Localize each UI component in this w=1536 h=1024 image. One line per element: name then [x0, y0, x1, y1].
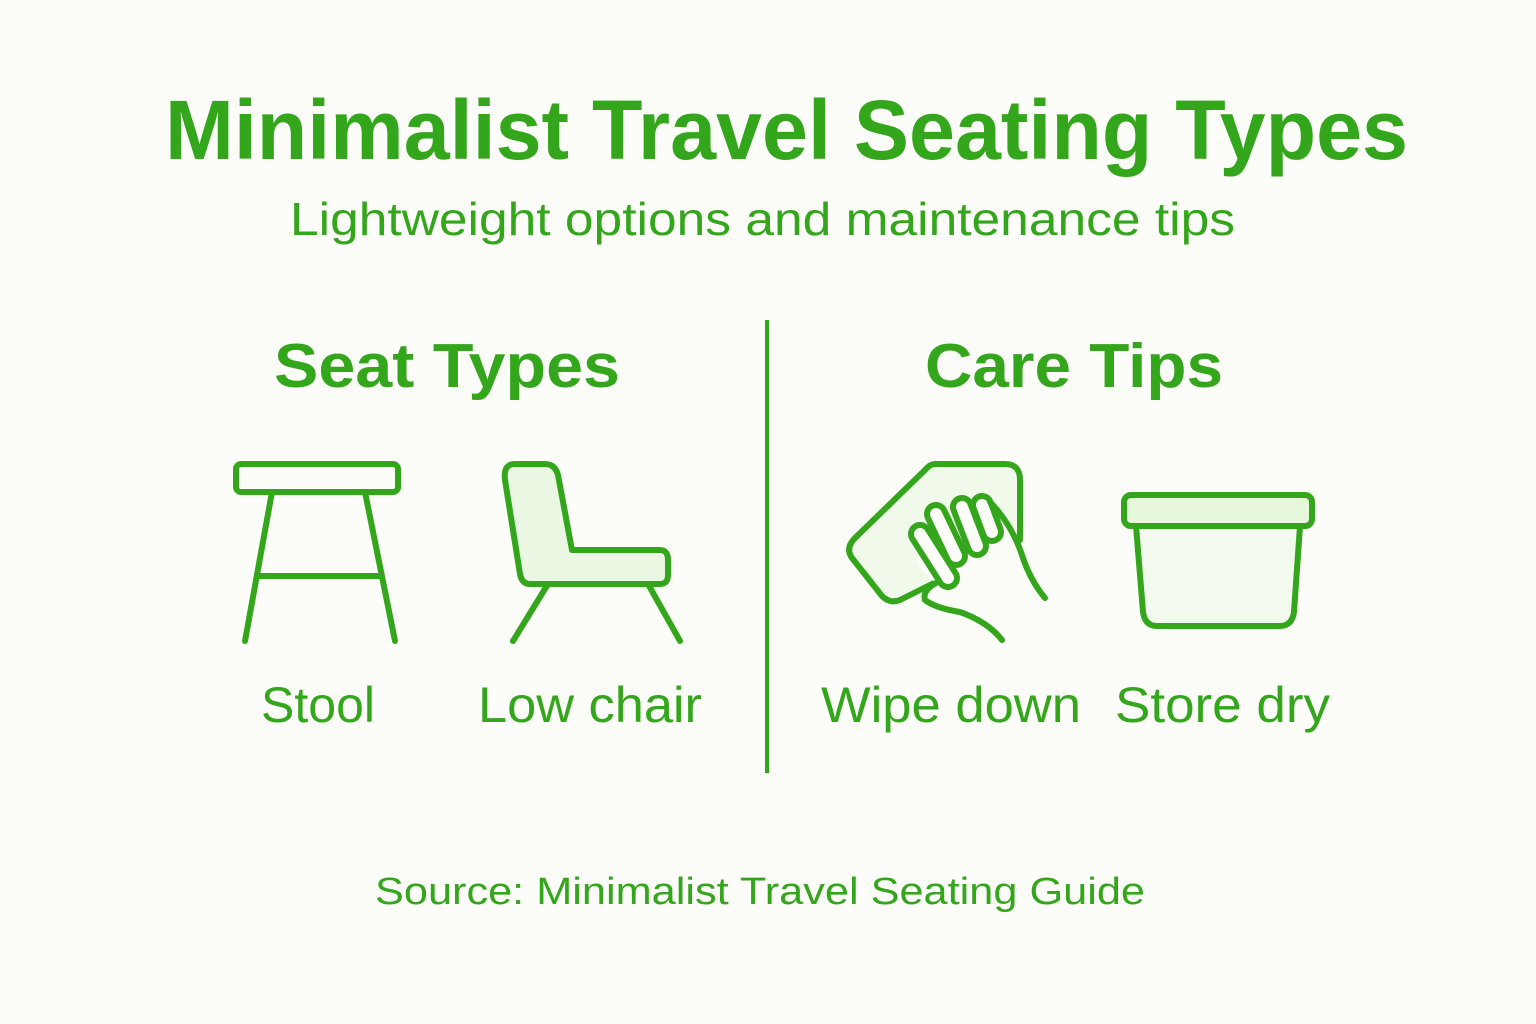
icon: store dry — [1124, 495, 1312, 626]
label: store dry: Store dry — [1115, 677, 1330, 733]
heading: seat types: Seat Types — [274, 332, 620, 401]
label: low chair: Low chair — [478, 677, 702, 733]
heading: care tips: Care Tips — [925, 332, 1223, 401]
subtitle: Lightweight options and maintenance tips — [290, 193, 1235, 245]
icon: stool — [236, 464, 398, 641]
source: Source: Minimalist Travel Seating Guide — [375, 871, 1145, 913]
icon: wipe down — [849, 464, 1045, 640]
divider — [765, 320, 769, 773]
label: stool: Stool — [261, 677, 375, 733]
title: Minimalist Travel Seating Types — [165, 83, 1408, 177]
icon: low chair — [505, 464, 680, 641]
label: wipe down: Wipe down — [821, 677, 1081, 733]
